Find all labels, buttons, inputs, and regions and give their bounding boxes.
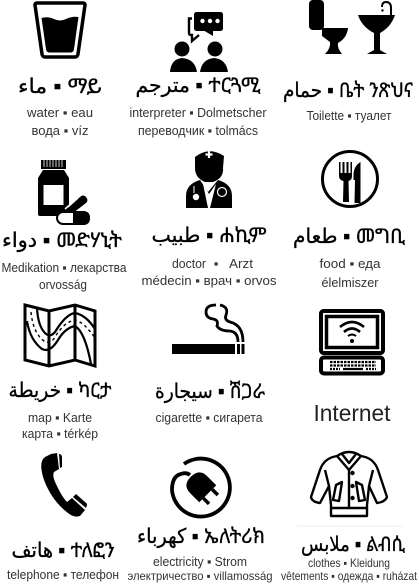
icon: glass of water — [35, 3, 85, 57]
text: doctor translations: doctor — [172, 256, 207, 271]
icon: doctor with stethoscope — [186, 151, 232, 208]
text: toilet translations: Toilette ▪ туалет — [306, 108, 392, 123]
panel: interpreter — [130, 12, 267, 138]
text: interpreter translations: переводчик ▪ tolmács — [138, 123, 258, 138]
text: electricity translations: electricity ▪ Strom — [153, 554, 247, 569]
text: water translations: вода ▪ víz — [32, 123, 88, 138]
text: map translations: карта ▪ térkép — [22, 426, 98, 441]
panel: doctor — [142, 151, 277, 288]
text: medication translations: orvosság — [39, 277, 87, 292]
heading: electricity: كهرباء ▪ ኤለትሪክ — [137, 525, 265, 548]
text: map translations: map ▪ Karte — [28, 410, 92, 425]
panel: electricity — [128, 459, 272, 583]
icon: two people talking — [170, 12, 228, 72]
text: electricity translations — [128, 554, 272, 583]
text: water translations: water ▪ eau — [26, 105, 93, 120]
icon: electric plug in circle — [172, 459, 230, 517]
text: food translations: élelmiszer — [322, 275, 379, 290]
text: food translations: food ▪ еда — [320, 256, 381, 271]
text: telephone translations: telephone ▪ телефон — [7, 567, 119, 582]
icon: laptop with wifi — [321, 311, 383, 374]
icon: folded road map — [25, 305, 95, 366]
text: medication translations: Medikation ▪ лекарства — [2, 260, 127, 275]
text: food translations — [320, 256, 381, 290]
heading: food: طعام ▪ መግቢ — [293, 225, 405, 248]
text: doctor translations — [142, 256, 277, 288]
panel: clothes — [281, 452, 418, 583]
icon: jacket — [311, 452, 387, 516]
heading: water: ماء ▪ ማይ — [18, 75, 102, 98]
icon: telephone handset — [41, 453, 87, 517]
text: doctor translations: médecin ▪ врач ▪ orvos — [142, 273, 277, 288]
text: water translations — [26, 105, 93, 138]
icon: fork and knife in circle — [322, 152, 378, 206]
panel: map — [8, 305, 112, 441]
text: map translations — [22, 410, 98, 441]
text: clothes translations: clothes ▪ Kleidung — [308, 556, 390, 570]
heading: interpreter: مترجم ▪ ተርጓሚ — [136, 74, 261, 97]
text: doctor translations: Arzt — [229, 256, 253, 271]
heading: toilet: حمام ▪ ቤት ንጽህና — [283, 79, 413, 102]
text: clothes translations — [281, 556, 418, 583]
panel: telephone — [7, 453, 119, 582]
icon: toilet and sink — [309, 0, 395, 54]
heading: cigarette: سيجارة ▪ ሽጋራ — [155, 380, 265, 403]
panel: toilet — [283, 0, 413, 123]
heading: internet: Internet — [314, 400, 391, 426]
panel: medication — [2, 160, 127, 292]
heading: clothes: ملابس ▪ ልብሲ — [301, 533, 405, 556]
heading: doctor: طبيب ▪ ሐኪም — [152, 224, 267, 247]
text: interpreter translations — [130, 105, 267, 138]
heading: map: خريطة ▪ ካርታ — [8, 379, 112, 402]
text: electricity translations: электричество ▪ villamosság — [128, 569, 272, 583]
panel: internet — [314, 311, 391, 426]
heading: medication: دواء ▪ መድሃኒት — [2, 229, 123, 252]
text: cigarette translations: cigarette ▪ сигарета — [156, 410, 263, 425]
panel: food — [293, 152, 405, 290]
panel: water — [18, 3, 102, 138]
panel: cigarette — [155, 305, 265, 425]
heading: telephone: هاتف ▪ ተለፎን — [12, 539, 114, 562]
icon: burning cigarette — [172, 305, 244, 354]
icon: pill bottle and capsules — [38, 160, 90, 225]
text: doctor translations: ▪ — [214, 256, 218, 271]
text: medication translations — [2, 260, 127, 292]
text: interpreter translations: interpreter ▪ Dolmetscher — [130, 105, 267, 120]
